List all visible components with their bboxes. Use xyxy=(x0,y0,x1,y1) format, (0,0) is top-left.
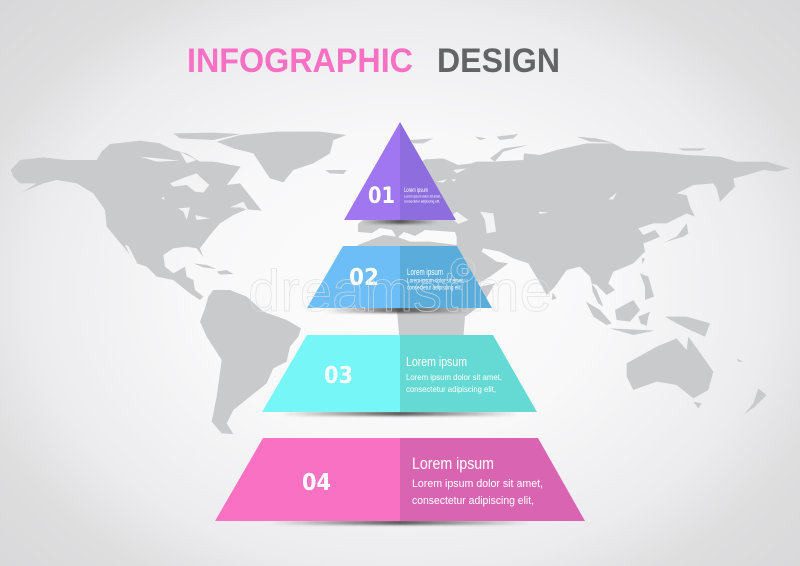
pyramid tier 1 xyxy=(344,122,456,224)
text block 2: Lorem ipsum dolor sit amet, xyxy=(407,278,464,284)
text block 4: Lorem ipsum dolor sit amet, xyxy=(412,478,543,490)
text block 1 xyxy=(404,188,441,204)
text block 2: consectetur adipiscing elit, xyxy=(407,286,462,292)
number 01: 01 xyxy=(368,184,395,209)
text block 1: Lorem ipsum xyxy=(404,188,428,194)
text block 4: Lorem ipsum xyxy=(412,454,494,473)
pyramid tier 2 xyxy=(307,246,492,313)
pyramid tier 3 xyxy=(262,335,537,416)
text block 3: Lorem ipsum dolor sit amet, xyxy=(406,372,502,382)
text block 3: Lorem ipsum xyxy=(406,354,467,369)
title: INFOGRAPHIC: INFOGRAPHIC xyxy=(187,42,413,80)
number 02: 02 xyxy=(349,263,379,291)
text block 3 xyxy=(406,354,502,394)
pyramid tier 4 xyxy=(215,438,585,525)
number 03: 03 xyxy=(324,361,353,389)
text block 1: consectetur adipiscing elit, xyxy=(404,200,440,204)
number 04: 04 xyxy=(302,468,331,496)
map: inland water xyxy=(125,152,617,263)
title: DESIGN: DESIGN xyxy=(437,42,560,80)
text block 2: Lorem ipsum xyxy=(407,267,443,277)
text block 3: consectetur adipiscing elit, xyxy=(406,384,496,394)
text block 4 xyxy=(412,454,543,507)
map: Americas and Greenland xyxy=(11,132,347,434)
map: Eurasia, Africa and Oceania xyxy=(333,134,790,415)
text block 1: Lorem ipsum dolor sit amet, xyxy=(404,194,441,198)
text block 2 xyxy=(407,267,464,292)
text block 4: consectetur adipiscing elit, xyxy=(412,495,534,507)
world map xyxy=(11,132,790,434)
watermark: dreamstime xyxy=(248,259,552,324)
title xyxy=(187,42,560,80)
